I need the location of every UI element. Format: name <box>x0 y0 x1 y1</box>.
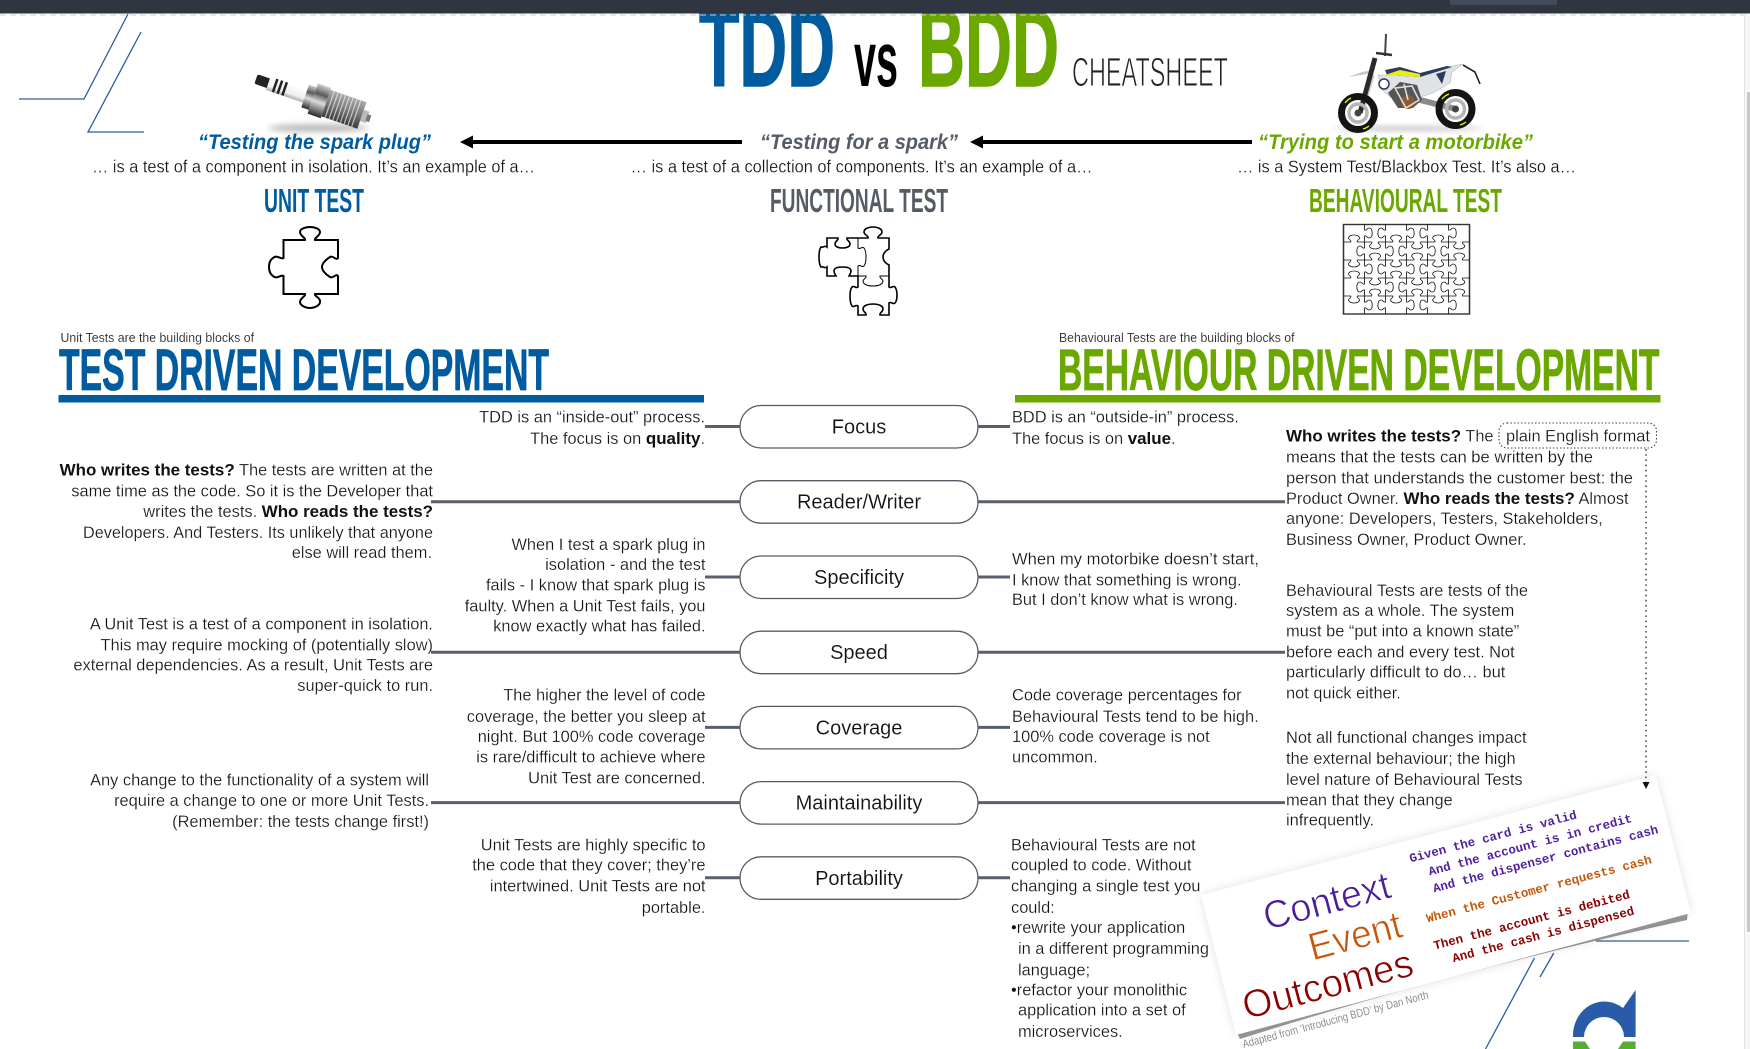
pill: Portability <box>740 857 978 899</box>
text: BDD specificity <box>1012 550 1259 609</box>
label: Context: Context <box>1259 864 1395 939</box>
caption: unit tests building blocks: Unit Tests are the building blocks of <box>60 330 254 345</box>
heading: trying to start a motorbike: “Trying to start a motorbike” <box>1258 131 1533 154</box>
heading: behavioural test: BEHAVIOURAL TEST <box>1309 182 1502 219</box>
text: BDD maintainability <box>1286 729 1527 830</box>
text: BDD speed: Behavioural Tests are tests of the <box>1286 582 1528 600</box>
pill: Coverage: Coverage <box>816 717 902 739</box>
title: CHEATSHEET <box>1072 49 1228 95</box>
pill: Reader/Writer: Reader/Writer <box>797 492 921 514</box>
text: BDD maintainability: level nature of Behavioural Tests <box>1286 771 1523 789</box>
text: TDD coverage: The higher the level of code <box>503 687 706 705</box>
label: Outcomes: Outcomes <box>1238 942 1418 1028</box>
pill: Specificity <box>740 556 978 598</box>
text: BDD portability: Behavioural Tests are not <box>1011 836 1196 854</box>
text: BDD speed <box>1286 582 1528 702</box>
text: BDD portability: coupled to code. Without <box>1011 856 1192 874</box>
description: functional test: … is a test of a collection of components. It’s an example of a… <box>630 156 1092 176</box>
arrow: plain English to card <box>1642 449 1650 789</box>
heading: testing for a spark: “Testing for a spark” <box>760 131 958 154</box>
icon: three puzzle pieces <box>819 227 897 315</box>
title: vs <box>854 15 898 103</box>
decorative corner lines top left <box>19 14 144 132</box>
text: TDD reader/writer: Who writes the tests? The tests are written at the <box>60 460 433 479</box>
text: BDD focus <box>1012 409 1239 448</box>
text: BDD reader/writer <box>1286 427 1633 549</box>
given lines: And the dispenser contains cash <box>1432 823 1660 896</box>
logo <box>1573 990 1636 1049</box>
text: TDD speed: A Unit Test is a test of a component in isolation. <box>90 615 433 633</box>
image: spark plug <box>251 64 376 134</box>
text: BDD reader/writer: Who writes the tests? The <box>1286 427 1494 446</box>
text: BDD maintainability: mean that they change <box>1286 792 1453 810</box>
text: TDD focus: TDD is an “inside-out” process. <box>479 409 705 427</box>
text: TDD specificity: isolation - and the test <box>545 556 706 574</box>
text: BDD specificity: I know that something is wrong. <box>1012 572 1242 590</box>
pill: Speed <box>740 631 978 674</box>
caption: behavioural tests building blocks: Behavioural Tests are the building blocks of <box>1059 330 1295 345</box>
text: TDD coverage: is rare/difficult to achieve where <box>476 748 706 766</box>
icon: single puzzle piece <box>269 227 338 308</box>
text: BDD portability: in a different programming <box>1018 940 1209 958</box>
text: TDD focus: The focus is on quality. <box>530 429 705 448</box>
text: TDD reader/writer: else will read them. <box>292 544 432 562</box>
browser top bar <box>0 0 1750 15</box>
callout: plain English format <box>1499 423 1656 448</box>
text: TDD coverage: coverage, the better you sleep at <box>467 708 706 726</box>
text: TDD maintainability: Any change to the functionality of a system will <box>90 772 429 790</box>
text: BDD focus: The focus is on value. <box>1012 429 1176 448</box>
text: BDD specificity: When my motorbike doesn’t start, <box>1012 550 1259 568</box>
text: TDD portability <box>472 836 706 917</box>
text: BDD maintainability: the external behaviour; the high <box>1286 750 1516 768</box>
text: TDD specificity: fails - I know that spark plug is <box>486 577 706 595</box>
then lines: And the cash is dispensed <box>1451 905 1636 966</box>
text: TDD speed: super-quick to run. <box>297 677 433 695</box>
text: TDD portability: the code that they cover; they’re <box>472 856 706 874</box>
description: unit test: … is a test of a component in isolation. It’s an example of a… <box>92 156 535 176</box>
text: TDD portability: intertwined. Unit Tests are not <box>490 878 706 896</box>
heading: functional test: FUNCTIONAL TEST <box>770 182 948 219</box>
card: context event outcomes <box>1201 775 1691 1039</box>
pill: Reader/Writer <box>740 481 978 523</box>
browser scrollbar <box>1744 14 1750 1049</box>
text: BDD portability: could: <box>1011 899 1055 917</box>
text: BDD speed: not quick either. <box>1286 684 1401 702</box>
text: BDD portability: •rewrite your application <box>1011 919 1185 937</box>
arrowhead right group <box>970 136 983 148</box>
text: TDD specificity: faulty. When a Unit Test fails, you <box>465 598 706 616</box>
given lines: Given the card is valid <box>1408 809 1578 866</box>
text: BDD portability <box>1011 836 1209 1041</box>
text: BDD portability: changing a single test you <box>1011 878 1201 896</box>
text: TDD reader/writer: same time as the code. So it is the Developer that <box>71 482 433 500</box>
caption: adapted from: Adapted from ‘Introducing BDD’ by Dan North <box>1241 990 1430 1049</box>
image: motorbike <box>1334 34 1482 130</box>
text: TDD coverage <box>467 687 706 788</box>
arrow: functional to unit <box>472 140 742 144</box>
text: TDD coverage: Unit Test are concerned. <box>528 770 706 788</box>
text: TDD specificity <box>465 536 706 636</box>
text: BDD reader/writer: means that the tests can be written by the <box>1286 448 1593 466</box>
text: BDD specificity: But I don’t know what is wrong. <box>1012 591 1238 609</box>
text: TDD speed <box>73 615 433 695</box>
when line: When the Customer requests cash <box>1425 853 1653 926</box>
arrow: behavioural to functional <box>982 140 1252 144</box>
heading: unit test: UNIT TEST <box>264 182 364 219</box>
text: BDD speed: particularly difficult to do… but <box>1286 664 1506 682</box>
text: BDD speed: must be “put into a known state” <box>1286 623 1519 641</box>
pill: Speed: Speed <box>830 642 888 664</box>
arrowhead left <box>460 136 473 148</box>
text: TDD speed: external dependencies. As a result, Unit Tests are <box>73 656 433 674</box>
then lines: Then the account is debited <box>1432 888 1632 953</box>
text: BDD coverage <box>1012 687 1259 766</box>
text: TDD maintainability: require a change to one or more Unit Tests. <box>114 792 429 810</box>
given lines <box>1408 789 1660 900</box>
text: BDD maintainability: Not all functional changes impact <box>1286 729 1527 747</box>
text: BDD portability: •refactor your monolithic <box>1011 982 1187 1000</box>
text: TDD coverage: night. But 100% code coverage <box>478 728 706 746</box>
text: TDD maintainability: (Remember: the tests change first!) <box>172 813 429 831</box>
callout: plain English format: plain English format <box>1506 428 1650 446</box>
text: BDD coverage: 100% code coverage is not <box>1012 728 1210 746</box>
pill: Maintainability <box>740 782 978 824</box>
text: TDD reader/writer: writes the tests. Who reads the tests? <box>142 502 433 521</box>
connector lines <box>431 426 1285 878</box>
text: TDD specificity: know exactly what has failed. <box>493 618 706 636</box>
text: TDD focus <box>479 409 705 448</box>
text: BDD reader/writer: Business Owner, Product Owner. <box>1286 531 1527 549</box>
pill: Coverage <box>740 706 978 749</box>
text: TDD maintainability <box>90 772 429 831</box>
text: BDD speed: before each and every test. Not <box>1286 644 1515 662</box>
given lines: And the account is in credit <box>1427 812 1634 879</box>
text: BDD portability: language; <box>1018 961 1090 979</box>
text: TDD specificity: When I test a spark plug in <box>511 536 706 554</box>
heading: test driven development: TEST DRIVEN DEVELOPMENT <box>59 338 549 403</box>
text: BDD reader/writer: Product Owner. Who reads the tests? Almost <box>1286 489 1629 508</box>
title <box>699 0 1228 110</box>
text: BDD focus: BDD is an “outside-in” process. <box>1012 409 1239 427</box>
label: Event: Event <box>1304 904 1407 969</box>
pill: Maintainability: Maintainability <box>796 793 922 815</box>
text: BDD speed: system as a whole. The system <box>1286 602 1514 620</box>
pill: Specificity: Specificity <box>814 567 904 589</box>
text: TDD speed: This may require mocking of (potentially slow) <box>100 636 433 654</box>
text: BDD reader/writer: anyone: Developers, Testers, Stakeholders, <box>1286 510 1603 528</box>
pill: Focus: Focus <box>832 416 886 438</box>
decorative corner lines bottom right <box>1486 941 1689 1049</box>
text: TDD portability: portable. <box>642 899 706 917</box>
text: TDD reader/writer: Developers. And Testers. Its unlikely that anyone <box>83 524 433 542</box>
text: BDD reader/writer: person that understands the customer best: the <box>1286 469 1633 487</box>
pill: Focus <box>740 406 978 448</box>
text: BDD portability: application into a set of <box>1018 1002 1186 1020</box>
text: BDD coverage: uncommon. <box>1012 748 1098 766</box>
description: behavioural test: … is a System Test/Blackbox Test. It’s also a… <box>1237 156 1576 176</box>
text: BDD maintainability: infrequently. <box>1286 812 1374 830</box>
text: TDD portability: Unit Tests are highly specific to <box>481 836 706 854</box>
icon: full jigsaw puzzle <box>1344 224 1470 314</box>
text: TDD reader/writer <box>60 460 433 562</box>
pill: Portability: Portability <box>815 868 903 890</box>
text: BDD portability: microservices. <box>1018 1023 1123 1041</box>
text: BDD coverage: Code coverage percentages for <box>1012 687 1242 705</box>
text: BDD coverage: Behavioural Tests tend to be high. <box>1012 708 1259 726</box>
heading: testing the spark plug: “Testing the spark plug” <box>198 131 431 154</box>
